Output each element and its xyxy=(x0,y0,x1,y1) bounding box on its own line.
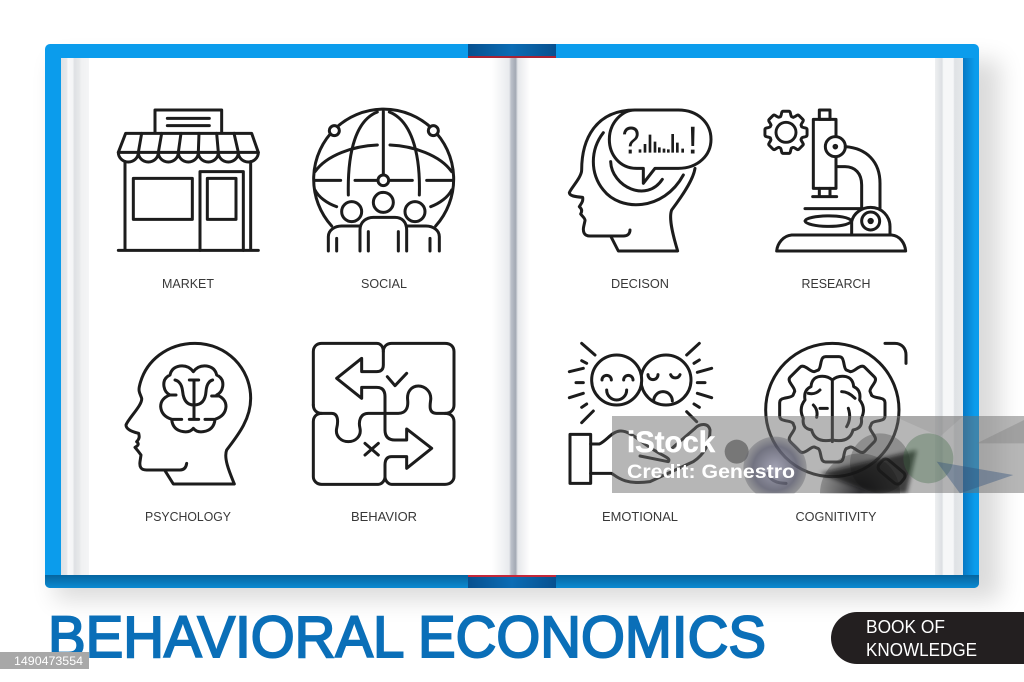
blue cover xyxy=(45,44,979,588)
label: decision: DECISON xyxy=(611,276,669,291)
top spine red edge xyxy=(468,56,556,58)
book gutter xyxy=(492,58,530,575)
icon: decision head xyxy=(569,110,711,251)
label: market: MARKET xyxy=(162,276,214,291)
icon: market xyxy=(118,110,258,250)
cover bottom band xyxy=(45,575,979,588)
stock id number: 1490473554 xyxy=(14,654,83,668)
stock id tag xyxy=(0,652,89,669)
left page edges xyxy=(61,58,89,575)
label: research: RESEARCH xyxy=(802,276,870,291)
open book xyxy=(45,44,1000,600)
exclamation mark: ! xyxy=(687,119,698,162)
cover right inner shade xyxy=(963,58,975,575)
label: cognitivity: COGNITIVITY xyxy=(796,509,877,524)
label: behavior: BEHAVIOR xyxy=(351,509,417,524)
badge: book of knowledge xyxy=(831,612,1024,664)
watermark band xyxy=(612,416,1024,494)
title: BEHAVIORAL ECONOMICS xyxy=(48,605,766,670)
right page edges xyxy=(935,58,963,575)
icon: cognitivity xyxy=(766,343,907,486)
bottom spine red edge xyxy=(468,575,556,577)
label: emotional: EMOTIONAL xyxy=(602,509,678,524)
icon: social xyxy=(314,109,454,251)
question mark: ? xyxy=(622,119,640,162)
watermark brand: iStock xyxy=(627,426,715,459)
watermark credit: Credit: Genestro xyxy=(627,461,795,483)
bottom spine xyxy=(468,575,556,588)
pages xyxy=(61,58,963,575)
icon: behavior puzzle xyxy=(313,343,454,484)
badge line one: BOOK OF xyxy=(866,617,945,637)
icon: psychology head xyxy=(126,343,251,484)
label: psychology: PSYCHOLOGY xyxy=(145,509,231,524)
badge line two: KNOWLEDGE xyxy=(866,640,977,660)
icon: emotional faces and hand xyxy=(569,343,712,483)
icon: research microscope xyxy=(765,110,906,251)
label: social: SOCIAL xyxy=(361,276,407,291)
top spine xyxy=(468,44,556,58)
